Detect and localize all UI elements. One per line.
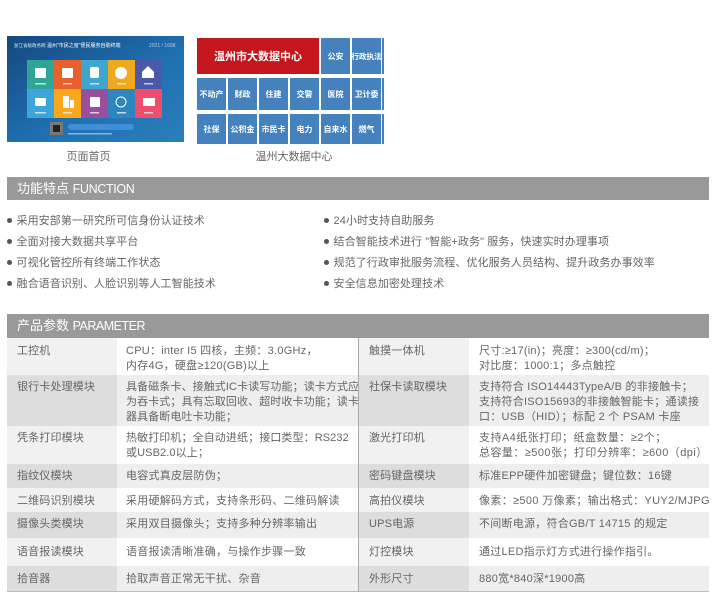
row: bank card and social security card <box>7 375 709 426</box>
row: voice and light control: 通过LED指示灯方式进行操作指引。 <box>479 546 659 558</box>
list: features left column: 全面对接大数据共享平台 <box>16 236 138 248</box>
row: QR reader and document camera: 采用硬解码方式，支持条形码、二维码解读 <box>126 495 340 507</box>
row: bank card and social security card: 银行卡处理模块 <box>17 381 95 393</box>
tile row 3: 燃气 <box>358 124 374 134</box>
panel: Wenzhou big data center grid <box>197 38 384 144</box>
screenshot: home page kiosk interface <box>7 36 184 142</box>
list: features left column: 融合语音识别、人脸识别等人工智能技术 <box>16 278 216 290</box>
row: microphone and dimensions: 880宽*840深*1900高 <box>479 573 586 585</box>
list: features right column: 安全信息加密处理技术 <box>334 278 444 290</box>
row: industrial PC and touch screen: 触摸一体机 <box>369 345 425 357</box>
row: bank card and social security card: 支持符合ISO15693的非接触智能卡；通读接 <box>479 396 699 408</box>
list: features right column: 规范了行政审批服务流程、优化服务人员结构、提升政务办事效率 <box>334 257 655 269</box>
row: voice and light control <box>7 538 709 566</box>
tile row 3 <box>197 114 381 144</box>
red title tile <box>197 38 319 74</box>
row: receipt and laser printers: 支持A4纸张打印；纸盒数量：≥2个； <box>479 432 667 444</box>
screenshot: home page kiosk interface: 2021 / 1608 <box>149 43 176 49</box>
row: industrial PC and touch screen: CPU：inter I5 四核，主频：3.0GHz， <box>126 345 318 357</box>
row: industrial PC and touch screen: 内存4G，硬盘≥120(GB)以上 <box>126 360 270 372</box>
row: industrial PC and touch screen: 对比度：1000:1；多点触控 <box>479 360 615 372</box>
row: microphone and dimensions: 拾音器 <box>17 573 50 585</box>
tile row 3: 自来水 <box>324 124 348 134</box>
row: voice and light control: 语音报读清晰准确，与操作步骤一致 <box>126 546 306 558</box>
row: fingerprint and keypad: 电容式真皮层防伪； <box>126 470 227 482</box>
row: industrial PC and touch screen: 工控机 <box>17 345 50 357</box>
tile row 2: 卫计委 <box>354 90 378 98</box>
tile row 3: 社保 <box>204 124 220 134</box>
list: features right column: 结合智能技术进行 "智能+政务" 服务，快速实时办理事项 <box>334 236 609 248</box>
list: features left column: 可视化管控所有终端工作状态 <box>16 257 161 269</box>
table: product parameters <box>7 338 710 592</box>
tile row 2: 不动产 <box>200 90 224 98</box>
tile row 1: 行政执法 <box>352 52 382 60</box>
row: microphone and dimensions: 拾取声音正常无干扰、杂音 <box>126 573 261 585</box>
row: fingerprint and keypad: 密码键盘模块 <box>369 470 436 482</box>
caption: home page: 页面首页 <box>66 151 110 163</box>
row: microphone and dimensions: 外形尺寸 <box>369 573 414 585</box>
caption: big data center: 温州大数据中心 <box>256 151 332 163</box>
row: receipt and laser printers: 或USB2.0以上； <box>126 447 209 459</box>
row: voice and light control: 灯控模块 <box>369 546 414 558</box>
tile row 2: 医院 <box>328 90 344 98</box>
screenshot: home page kiosk interface: 浙江省级政务网 <box>14 42 46 49</box>
red title tile: 温州市大数据中心 <box>214 51 302 63</box>
tile row 2: 交警 <box>296 90 312 98</box>
row: bank card and social security card: 为吞卡式；具有忘取回收、超时收卡功能；读卡 <box>126 396 359 408</box>
row: QR reader and document camera: 高拍仪模块 <box>369 495 425 507</box>
row: camera and UPS: 摄像头类模块 <box>17 518 84 530</box>
list: features left column <box>7 214 216 290</box>
row: bank card and social security card: 口：USB（HID）；标配 2 个 PSAM 卡座 <box>479 411 681 423</box>
heading: function: 功能特点 FUNCTION <box>17 181 134 196</box>
row: receipt and laser printers: 总容量：≥500张；打印分辨率：≥600（dpi） <box>479 447 708 459</box>
row: bank card and social security card: 支持符合 ISO14443TypeA/B 的非接触卡； <box>479 381 693 393</box>
row: industrial PC and touch screen: 尺寸:≥17(in)；亮度：≥300(cd/m)； <box>479 345 655 357</box>
row: bank card and social security card: 器具备断电吐卡功能； <box>126 411 237 423</box>
tile row 2: 住建 <box>266 90 282 98</box>
heading: function <box>7 177 709 200</box>
screenshot: home page kiosk interface: 温州"市民之窗"便民服务自助终端 <box>47 42 121 49</box>
row: bank card and social security card: 具备磁条卡、接触式IC卡读写功能；读卡方式应 <box>126 381 359 393</box>
heading: parameter: 产品参数 PARAMETER <box>17 318 145 333</box>
row: QR reader and document camera <box>7 488 709 512</box>
row: receipt and laser printers: 激光打印机 <box>369 432 425 444</box>
row: camera and UPS: 不间断电源，符合GB/T 14715 的规定 <box>479 518 668 530</box>
tile row 3: 市民卡 <box>262 124 286 134</box>
row: camera and UPS: 采用双目摄像头；支持多种分辨率输出 <box>126 518 317 530</box>
list: features right column: 24小时支持自助服务 <box>334 215 435 227</box>
row: QR reader and document camera: 二维码识别模块 <box>17 495 95 507</box>
row: camera and UPS <box>7 512 709 538</box>
tile row 2: 财政 <box>234 90 250 98</box>
row: camera and UPS: UPS电源 <box>369 518 414 530</box>
row: fingerprint and keypad: 标准EPP硬件加密键盘；键位数：16键 <box>479 470 672 482</box>
tile row 1 <box>321 38 382 74</box>
row: microphone and dimensions <box>7 566 709 592</box>
row: receipt and laser printers <box>7 426 709 464</box>
row: industrial PC and touch screen <box>7 338 709 375</box>
list: features left column: 采用安部第一研究所可信身份认证技术 <box>16 215 205 227</box>
tile row 3: 电力 <box>296 124 312 134</box>
row: fingerprint and keypad <box>7 464 709 488</box>
row: receipt and laser printers: 凭条打印模块 <box>17 432 84 444</box>
row: bank card and social security card: 社保卡读取模块 <box>369 381 447 393</box>
tile row 2 <box>197 78 381 110</box>
row: QR reader and document camera: 像素：≥500 万像素；输出格式：YUY2/MJPG <box>479 495 710 507</box>
row: fingerprint and keypad: 指纹仪模块 <box>17 470 73 482</box>
tile row 3: 公积金 <box>230 124 254 134</box>
tile row 1: 公安 <box>328 52 344 60</box>
list: features right column <box>324 214 655 290</box>
heading: parameter <box>7 314 709 338</box>
row: receipt and laser printers: 热敏打印机；全自动进纸；接口类型：RS232 <box>126 432 349 444</box>
row: voice and light control: 语音报读模块 <box>17 546 84 558</box>
